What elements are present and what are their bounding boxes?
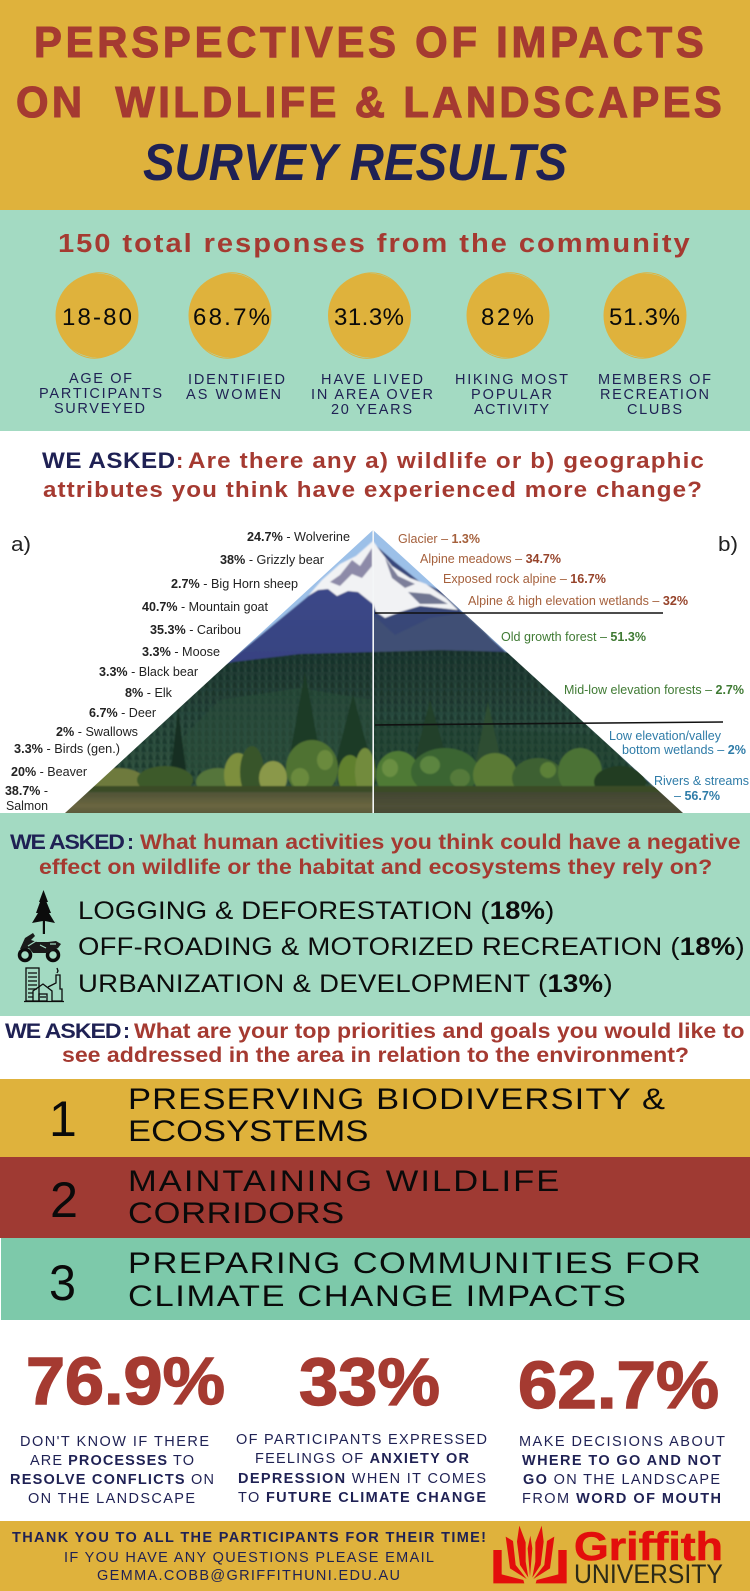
stat: age of participants: AGE OF (69, 371, 132, 387)
stat: anxiety or depression (236, 1345, 487, 1506)
stat: members of recreation clubs: MEMBERS OF (598, 372, 711, 388)
geographic labels (398, 532, 749, 803)
band divider: alpine to forest (375, 612, 663, 614)
stat: lived in area over 20 years (311, 265, 433, 418)
question: top priorities and goals: see addressed in the area in relation to the environment? (62, 1043, 689, 1067)
question: top priorities and goals: What are your top priorities and goals you would like to (134, 1019, 745, 1043)
stat: hiking most popular activity: 82% (481, 304, 534, 331)
stat: conflict processes: ARE PROCESSES TO (30, 1453, 194, 1469)
stat: lived in area over 20 years: IN AREA OVER (311, 387, 433, 403)
priority 2 bar: MAINTAINING WILDLIFE (128, 1164, 559, 1197)
water (65, 792, 683, 813)
stat: age of participants: SURVEYED (54, 401, 145, 417)
wildlife labels: 24.7% - Wolverine (247, 530, 350, 544)
wildlife labels: 38.7% - (5, 784, 48, 798)
question: wildlife or geographic attributes (42, 448, 704, 502)
wildlife labels: 3.3% - Moose (142, 645, 220, 659)
question: top priorities and goals: WE ASKED (5, 1019, 122, 1043)
wildlife labels: 6.7% - Deer (89, 706, 156, 720)
stat: hiking most popular activity: POPULAR (471, 387, 552, 403)
title: ON WILDLIFE & LANDSCAPES (16, 78, 722, 127)
stat: anxiety or depression: TO FUTURE CLIMATE CHANGE (238, 1490, 486, 1506)
title (16, 18, 722, 127)
question: wildlife or geographic attributes: attributes you think have experienced more change? (43, 477, 702, 502)
thank you note: IF YOU HAVE ANY QUESTIONS PLEASE EMAIL (64, 1550, 434, 1566)
wildlife labels: 20% - Beaver (11, 765, 87, 779)
stat: word of mouth: MAKE DECISIONS ABOUT (519, 1434, 725, 1450)
stat: identified as women (183, 265, 285, 403)
priority 2 bar: 2 (50, 1172, 78, 1228)
question: human activities (10, 830, 741, 879)
geographic labels: Mid-low elevation forests – 2.7% (564, 683, 744, 697)
panel: negative human activities (0, 813, 750, 1016)
stat: identified as women: IDENTIFIED (188, 372, 285, 388)
stat: anxiety or depression: OF PARTICIPANTS EXPRESSED (236, 1432, 487, 1448)
geographic labels: Rivers & streams (654, 774, 749, 788)
stat: word of mouth: GO ON THE LANDSCAPE (523, 1472, 720, 1488)
thank you note: THANK YOU TO ALL THE PARTICIPANTS FOR THEIR TIME! (12, 1530, 486, 1546)
question: human activities: What human activities you think could have a negative (140, 830, 741, 854)
priority 3 bar (1, 1238, 750, 1320)
question: wildlife or geographic attributes: WE ASKED (42, 448, 175, 473)
question: top priorities and goals: : (123, 1020, 130, 1043)
stat: word of mouth: WHERE TO GO AND NOT (522, 1453, 721, 1469)
question: human activities: effect on wildlife or the habitat and ecosystems they rely on? (39, 855, 712, 879)
icon: city buildings (24, 968, 64, 1002)
panel: title header (0, 0, 750, 210)
panel: community response stats (0, 210, 750, 431)
priority 1 bar: ECOSYSTEMS (128, 1114, 368, 1147)
band divider: forest to valley (375, 722, 723, 725)
stat: identified as women: 68.7% (193, 304, 270, 331)
question: top priorities and goals (5, 1019, 744, 1067)
panel: footer (0, 1521, 750, 1591)
wildlife labels (5, 530, 350, 813)
stat: conflict processes (10, 1344, 225, 1507)
bushes (88, 739, 662, 794)
label: b): b) (718, 534, 738, 556)
mountain photo pyramid (60, 525, 690, 820)
priority 1 bar (0, 1079, 750, 1157)
wildlife labels: 3.3% - Birds (gen.) (14, 742, 120, 756)
tall trees (172, 712, 186, 770)
wildlife labels: 2.7% - Big Horn sheep (171, 577, 298, 591)
stat: word of mouth: FROM WORD OF MOUTH (522, 1491, 721, 1507)
priority 3 bar: CLIMATE CHANGE IMPACTS (128, 1279, 626, 1312)
wildlife labels: 2% - Swallows (56, 725, 138, 739)
stat: age of participants (39, 265, 162, 417)
logo: Griffith University: Griffith (574, 1525, 723, 1569)
icon: conifer tree (32, 890, 55, 934)
stat: conflict processes: ON THE LANDSCAPE (28, 1491, 195, 1507)
priority 3 bar: PREPARING COMMUNITIES FOR (128, 1246, 701, 1279)
question: human activities: WE ASKED (10, 830, 125, 854)
stat: conflict processes: RESOLVE CONFLICTS ON (10, 1472, 214, 1488)
geographic labels: Alpine meadows – 34.7% (420, 552, 561, 566)
geographic labels: bottom wetlands – 2% (622, 743, 746, 757)
wildlife labels: 40.7% - Mountain goat (142, 600, 269, 614)
geographic labels: – 56.7% (674, 789, 720, 803)
stat: lived in area over 20 years: 31.3% (334, 304, 404, 331)
logo: Griffith University: UNIVERSITY (574, 1559, 723, 1589)
icon: quad bike (20, 933, 61, 960)
stat: anxiety or depression: 33% (299, 1345, 440, 1420)
wildlife labels: 8% - Elk (125, 686, 173, 700)
activity: urbanization: URBANIZATION & DEVELOPMENT (13%) (78, 969, 613, 998)
stat: members of recreation clubs: RECREATION (600, 387, 709, 403)
priority 3 bar: 3 (49, 1255, 76, 1311)
stat: age of participants: 18-80 (62, 304, 132, 331)
wildlife labels: 38% - Grizzly bear (220, 553, 324, 567)
question: wildlife or geographic attributes: Are there any a) wildlife or b) geographic (188, 448, 704, 473)
stat: identified as women: AS WOMEN (186, 387, 281, 403)
geographic labels: Low elevation/valley (609, 729, 722, 743)
stat: hiking most popular activity: HIKING MOST (455, 372, 568, 388)
stat: conflict processes: 76.9% (26, 1344, 225, 1419)
label: a): a) (11, 534, 31, 556)
thank you note (12, 1530, 486, 1584)
stat: hiking most popular activity: ACTIVITY (474, 402, 549, 418)
stat: anxiety or depression: DEPRESSION WHEN IT COMES (238, 1471, 486, 1487)
priority 1 bar: PRESERVING BIODIVERSITY & (128, 1082, 666, 1115)
stat: members of recreation clubs: 51.3% (609, 304, 680, 331)
priority 2 bar (0, 1157, 750, 1238)
priority 1 bar: 1 (49, 1091, 77, 1147)
wildlife labels: Salmon (6, 799, 48, 813)
pyramid centre divider (372, 530, 374, 813)
stat: conflict processes: DON'T KNOW IF THERE (20, 1434, 209, 1450)
stat: members of recreation clubs: CLUBS (627, 402, 682, 418)
activity: off-roading: OFF-ROADING & MOTORIZED RECREATION (18%) (78, 932, 745, 961)
priority 2 bar: CORRIDORS (128, 1196, 344, 1229)
pyramid chart: mountain landscape with labels (5, 525, 749, 820)
wildlife labels: 35.3% - Caribou (150, 623, 241, 637)
title: PERSPECTIVES OF IMPACTS (34, 18, 704, 67)
stat: lived in area over 20 years: 20 YEARS (331, 402, 412, 418)
stat: members of recreation clubs (598, 265, 711, 418)
stat: word of mouth: 62.7% (518, 1348, 719, 1423)
geographic labels: Exposed rock alpine – 16.7% (443, 572, 606, 586)
stat: age of participants: PARTICIPANTS (39, 386, 162, 402)
geographic labels: Old growth forest – 51.3% (501, 630, 646, 644)
question: wildlife or geographic attributes: : (176, 448, 183, 473)
stat: hiking most popular activity (455, 265, 568, 418)
logo: Griffith University (493, 1525, 723, 1589)
activity: logging: LOGGING & DEFORESTATION (18%) (78, 896, 554, 925)
stat: anxiety or depression: FEELINGS OF ANXIETY OR (255, 1451, 470, 1467)
geographic labels: Alpine & high elevation wetlands – 32% (468, 594, 688, 608)
wildlife labels: 3.3% - Black bear (99, 665, 198, 679)
stat: lived in area over 20 years: HAVE LIVED (321, 372, 423, 388)
subtitle: survey results: SURVEY RESULTS (143, 134, 567, 192)
geographic labels: Glacier – 1.3% (398, 532, 480, 546)
heading: total responses: 150 total responses from the community (58, 228, 690, 258)
question: human activities: : (127, 831, 134, 854)
thank you note: GEMMA.COBB@GRIFFITHUNI.EDU.AU (97, 1568, 400, 1584)
stat: word of mouth (518, 1348, 725, 1507)
